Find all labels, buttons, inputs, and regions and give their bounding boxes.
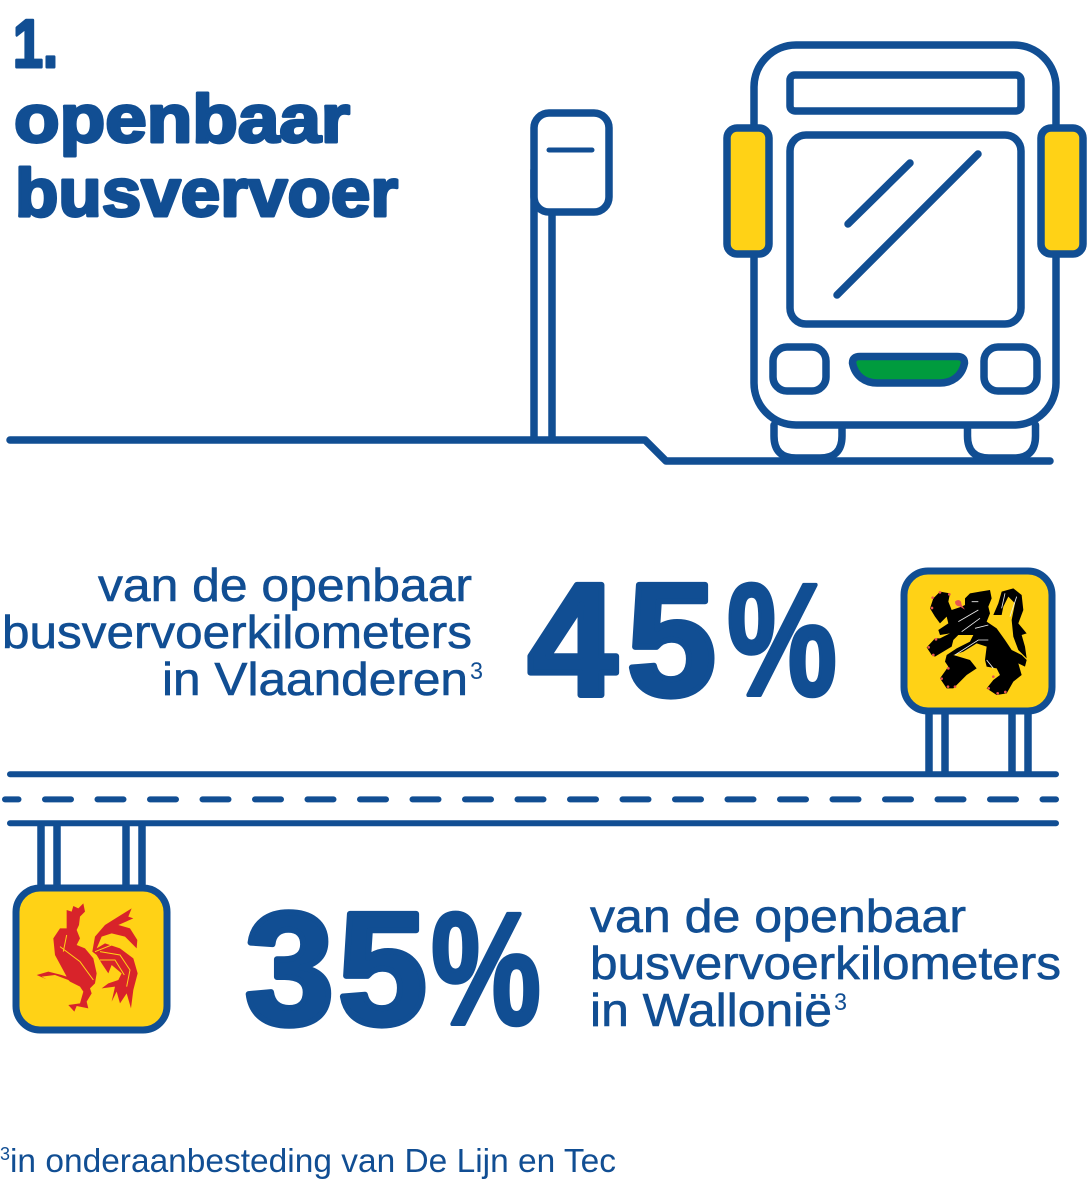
text: Wallonië: in Wallonië <box>590 984 832 1036</box>
text: Wallonië <box>590 890 1061 1036</box>
text: Vlaanderen <box>2 559 483 705</box>
text: Wallonië: 3 <box>834 989 847 1016</box>
sign: Wallonia rooster <box>16 826 167 1030</box>
rooster feather lines <box>60 935 130 987</box>
text: Vlaanderen: in Vlaanderen <box>162 653 468 705</box>
lion tongue and claws <box>927 591 1007 695</box>
right headlight <box>984 347 1037 391</box>
title: busvervoer <box>15 155 398 231</box>
bus windscreen <box>790 135 1021 324</box>
number: 35% <box>245 879 541 1058</box>
text: Wallonië: busvervoerkilometers <box>590 937 1061 989</box>
left headlight <box>773 347 826 391</box>
bus destination panel <box>790 75 1021 111</box>
footnote: in onderaanbesteding van De Lijn en Tec <box>10 1142 616 1179</box>
text: Vlaanderen: van de openbaar <box>98 559 472 611</box>
number: 35%: % <box>431 879 541 1058</box>
icon: bus stop <box>534 113 609 437</box>
windscreen reflections <box>837 154 978 295</box>
title: 1. <box>13 6 58 82</box>
icon: red rooster <box>37 903 138 1012</box>
bus body <box>754 45 1056 425</box>
title: openbaar <box>14 81 350 157</box>
green grille <box>852 356 964 383</box>
icon: bus <box>727 45 1083 458</box>
icon: black lion <box>927 588 1027 695</box>
number: 35%: 35 <box>245 879 427 1058</box>
number: 45% <box>528 550 837 729</box>
lion highlights <box>955 593 1017 668</box>
number: 45%: 45 <box>528 550 716 729</box>
road with kerb <box>10 440 1050 461</box>
road with dashed centre line <box>5 774 1056 823</box>
left mirror <box>727 128 769 254</box>
text: Wallonië: van de openbaar <box>590 890 966 942</box>
footnote: 3 <box>0 1144 10 1164</box>
text: Vlaanderen: busvervoerkilometers <box>2 606 472 658</box>
bus wheels <box>774 425 1036 458</box>
text: Vlaanderen: 3 <box>470 658 483 685</box>
number: 45%: % <box>727 550 837 729</box>
right mirror <box>1041 128 1083 254</box>
title <box>13 6 398 231</box>
sign: Flanders lion <box>904 571 1052 772</box>
